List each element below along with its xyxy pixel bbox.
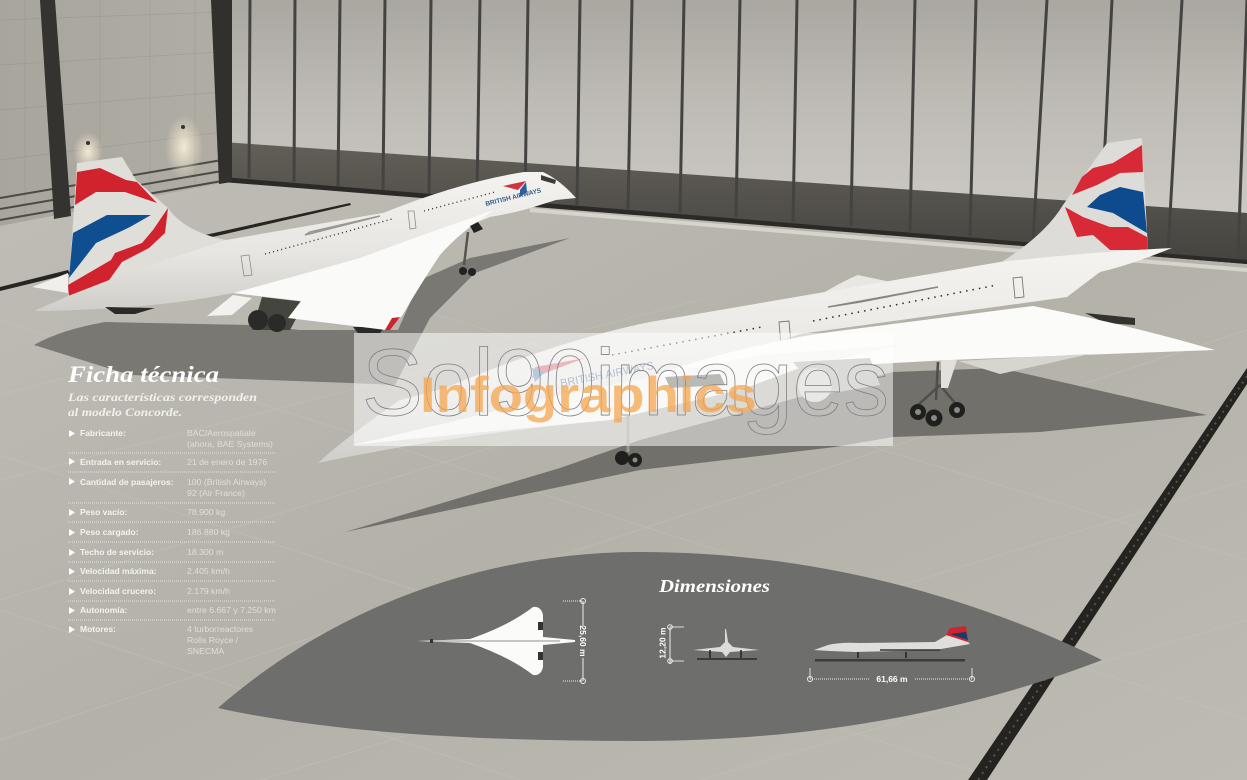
rear aircraft engines (105, 297, 385, 333)
shadow of rear aircraft (34, 238, 570, 385)
dimension: height 12,20 m: 12,20 m (657, 627, 667, 659)
front aircraft nose gear (615, 415, 642, 467)
watermark panel (354, 330, 893, 446)
panel: ficha técnica (67, 362, 276, 656)
table values: SNECMA (187, 646, 224, 656)
rear aircraft tailplane stub (32, 273, 68, 293)
table bullets (69, 430, 75, 633)
table values: 21 de enero de 1976 (187, 457, 267, 467)
front aircraft tail fin (1000, 138, 1148, 263)
front aircraft rear engines (1085, 313, 1135, 325)
panel: dimensiones (218, 552, 1102, 741)
table values: 78.900 kg (187, 507, 225, 517)
table values (187, 428, 276, 656)
watermark outlined text: Sol90images (362, 330, 889, 436)
rear aircraft doors (241, 211, 416, 276)
rear aircraft tail fin (68, 157, 226, 297)
table dividers (68, 453, 275, 620)
dimension: wingspan 25,60 m: 25,60 m (578, 625, 588, 657)
rear aircraft cockpit (541, 175, 556, 184)
table values: 100 (British Airways) (187, 477, 266, 487)
dimension: height 12,20 m (657, 625, 684, 664)
table values: BAC/Aerospatiale (187, 428, 256, 438)
heading: dimensiones: Dimensiones (658, 576, 770, 596)
table labels: Peso cargado: (80, 527, 139, 537)
front aircraft forward wing and engines (352, 345, 900, 445)
table labels: Motores: (80, 624, 116, 634)
table values: (ahora, BAE Systems) (187, 439, 273, 449)
dimension: length 61,66 m: 61,66 m (876, 674, 908, 684)
front aircraft main gear (910, 360, 965, 426)
shadow of front aircraft (345, 368, 1207, 532)
table labels: Techo de servicio: (80, 547, 154, 557)
front aircraft wing slot (828, 287, 938, 307)
hangar left concrete wall (0, 0, 232, 226)
table labels: Autonomía: (80, 605, 127, 615)
subtitle: Las características corresponden (67, 390, 257, 404)
table values: 2.405 km/h (187, 566, 230, 576)
front aircraft far wing (818, 275, 905, 296)
table labels: Velocidad máxima: (80, 566, 157, 576)
top view aircraft (417, 607, 575, 675)
subtitle (67, 390, 257, 419)
table values: entre 6.667 y 7.250 km (187, 605, 276, 615)
table labels: Cantidad de pasajeros: (80, 477, 174, 487)
front aircraft underwing nacelle (958, 354, 1090, 374)
table labels: Entrada en servicio: (80, 457, 161, 467)
dimensions backdrop (218, 552, 1102, 741)
dimension: wingspan 25,60 m (563, 598, 588, 684)
rear aircraft wing (233, 210, 494, 330)
table labels: Fabricante: (80, 428, 126, 438)
table values: 18.300 m (187, 547, 223, 557)
subtitle: al modelo Concorde. (68, 405, 182, 419)
floor drain lines (0, 203, 1247, 780)
watermark orange text: Infographics (420, 367, 757, 423)
front aircraft logo: BRITISH AIRWAYS (559, 360, 655, 390)
rear aircraft main gear (459, 222, 483, 276)
table values: Rolls Royce / (187, 635, 239, 645)
table labels: Velocidad crucero: (80, 586, 156, 596)
side view aircraft (814, 626, 970, 662)
front aircraft fuselage (318, 248, 1172, 463)
front aircraft wing (633, 306, 1215, 405)
front aircraft door (779, 277, 1024, 345)
front view aircraft (693, 629, 759, 660)
table labels (80, 428, 174, 634)
rear aircraft windows (265, 192, 495, 254)
rear aircraft logo: BRITISH AIRWAYS (485, 187, 543, 208)
front Concorde aircraft (318, 138, 1215, 467)
table labels: Peso vacío: (80, 507, 127, 517)
front aircraft windows (612, 285, 997, 355)
hangar back wall panels (222, 0, 1247, 264)
dimension: length 61,66 m (808, 668, 974, 684)
table values: 186.880 kg (187, 527, 230, 537)
heading: ficha técnica: Ficha técnica (67, 362, 219, 387)
rear Concorde aircraft (32, 157, 576, 333)
hangar floor (0, 170, 1247, 780)
table values: 92 (Air France) (187, 488, 245, 498)
rear aircraft wing slot (305, 216, 380, 235)
table values: 4 turborreactores (187, 624, 254, 634)
table values: 2.179 km/h (187, 586, 230, 596)
rear aircraft fuselage (34, 172, 576, 311)
